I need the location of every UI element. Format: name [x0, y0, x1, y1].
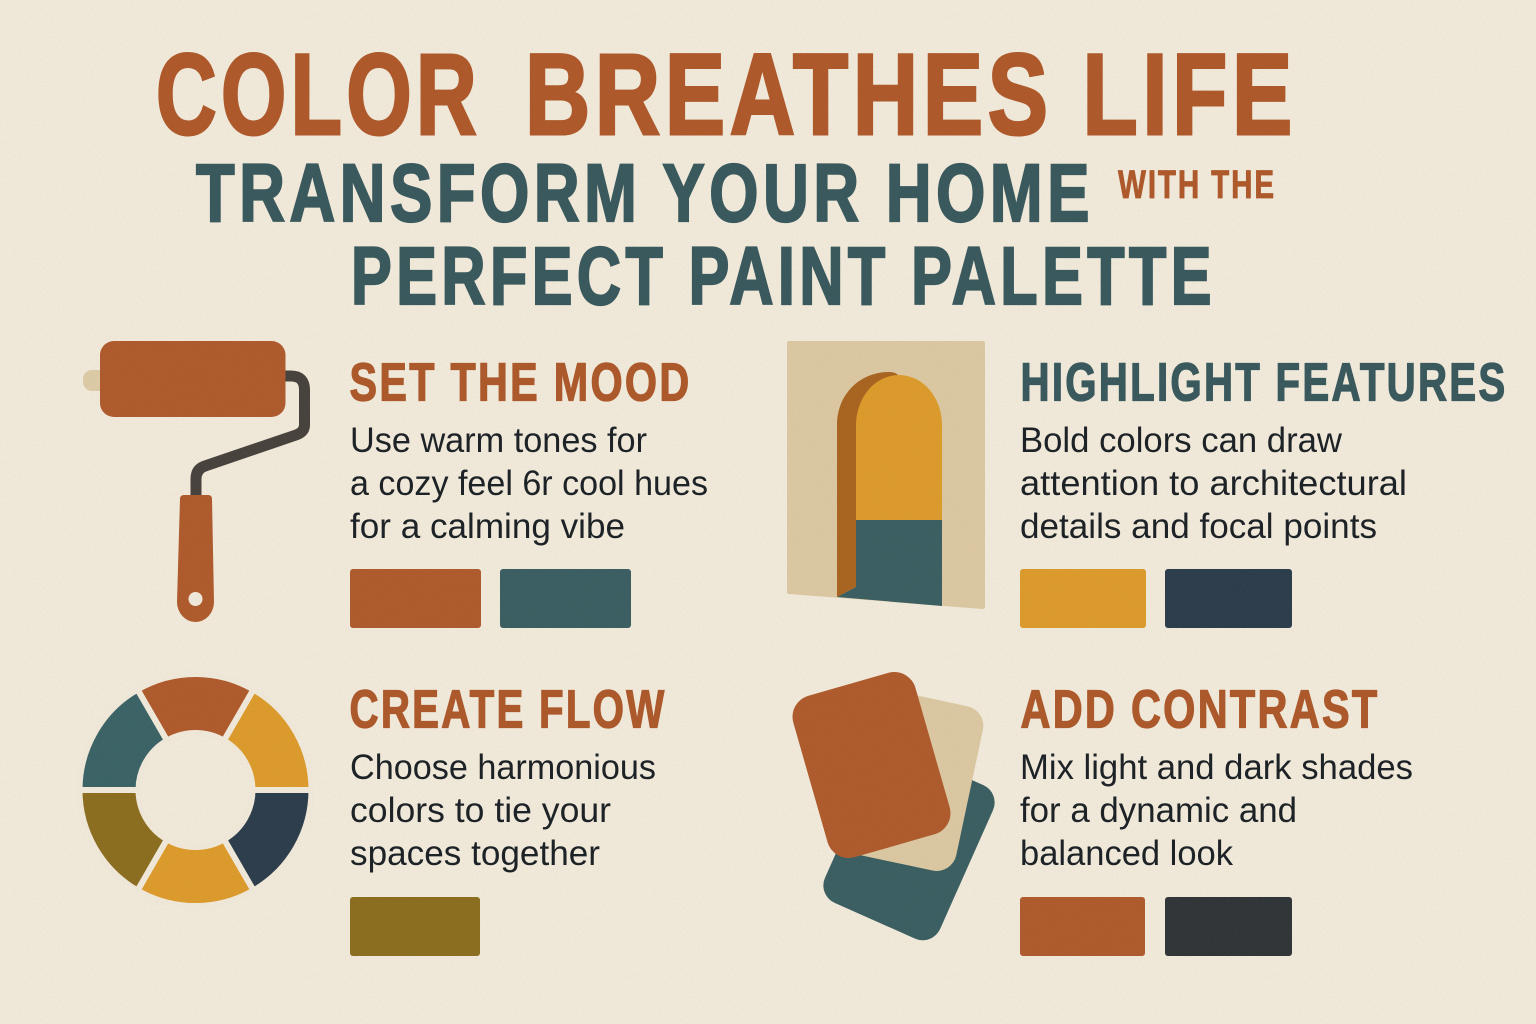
text: set the mood body: Use warm tones for [350, 421, 647, 460]
text: add contrast body: balanced look [1020, 834, 1233, 873]
text: highlight features body: Bold colors can draw [1020, 421, 1343, 460]
title [156, 31, 1297, 322]
heading: add contrast: ADD CONTRAST [1020, 680, 1380, 740]
text: create flow body: colors to tie your [350, 791, 611, 830]
title line: color breathes life [156, 31, 1297, 159]
title line: color breathes life: COLOR [156, 31, 481, 159]
title line: color breathes life: BREATHES LIFE [525, 31, 1297, 159]
panel: set the mood [83, 341, 708, 628]
heading: set the mood: SET THE MOOD [350, 352, 692, 412]
subtitle line: perfect paint palette: PERFECT PAINT PALETTE [351, 231, 1216, 322]
icon: paint roller [83, 341, 304, 622]
text: create flow body: Choose harmonious [350, 748, 656, 787]
text: set the mood body [350, 421, 708, 546]
text: highlight features body: attention to architectural [1020, 464, 1407, 503]
panel: create flow [79, 674, 666, 956]
text: create flow body [350, 748, 656, 873]
subtitle line: transform your home: TRANSFORM YOUR HOME [196, 148, 1094, 239]
swatches: gold and navy [1020, 569, 1292, 628]
text: add contrast body: for a dynamic and [1020, 791, 1297, 830]
text: set the mood body: for a calming vibe [350, 507, 625, 546]
text: add contrast body [1020, 748, 1413, 873]
panel: highlight features [787, 341, 1508, 628]
swatches: rust and charcoal [1020, 897, 1292, 956]
text: create flow body: spaces together [350, 834, 600, 873]
icon: arched doorway [787, 341, 985, 609]
panel: add contrast [787, 667, 1413, 956]
icon: color wheel [79, 674, 312, 906]
heading: create flow: CREATE FLOW [350, 680, 666, 740]
text: highlight features body: details and focal points [1020, 507, 1377, 546]
swatch: olive [350, 897, 480, 956]
text: set the mood body: a cozy feel 6r cool hues [350, 464, 708, 503]
subtitle connector: with the: WITH THE [1118, 163, 1276, 207]
icon: overlapping paint cards [787, 667, 1001, 946]
text: highlight features body [1020, 421, 1407, 546]
swatches: rust and teal [350, 569, 631, 628]
text: add contrast body: Mix light and dark shades [1020, 748, 1413, 787]
